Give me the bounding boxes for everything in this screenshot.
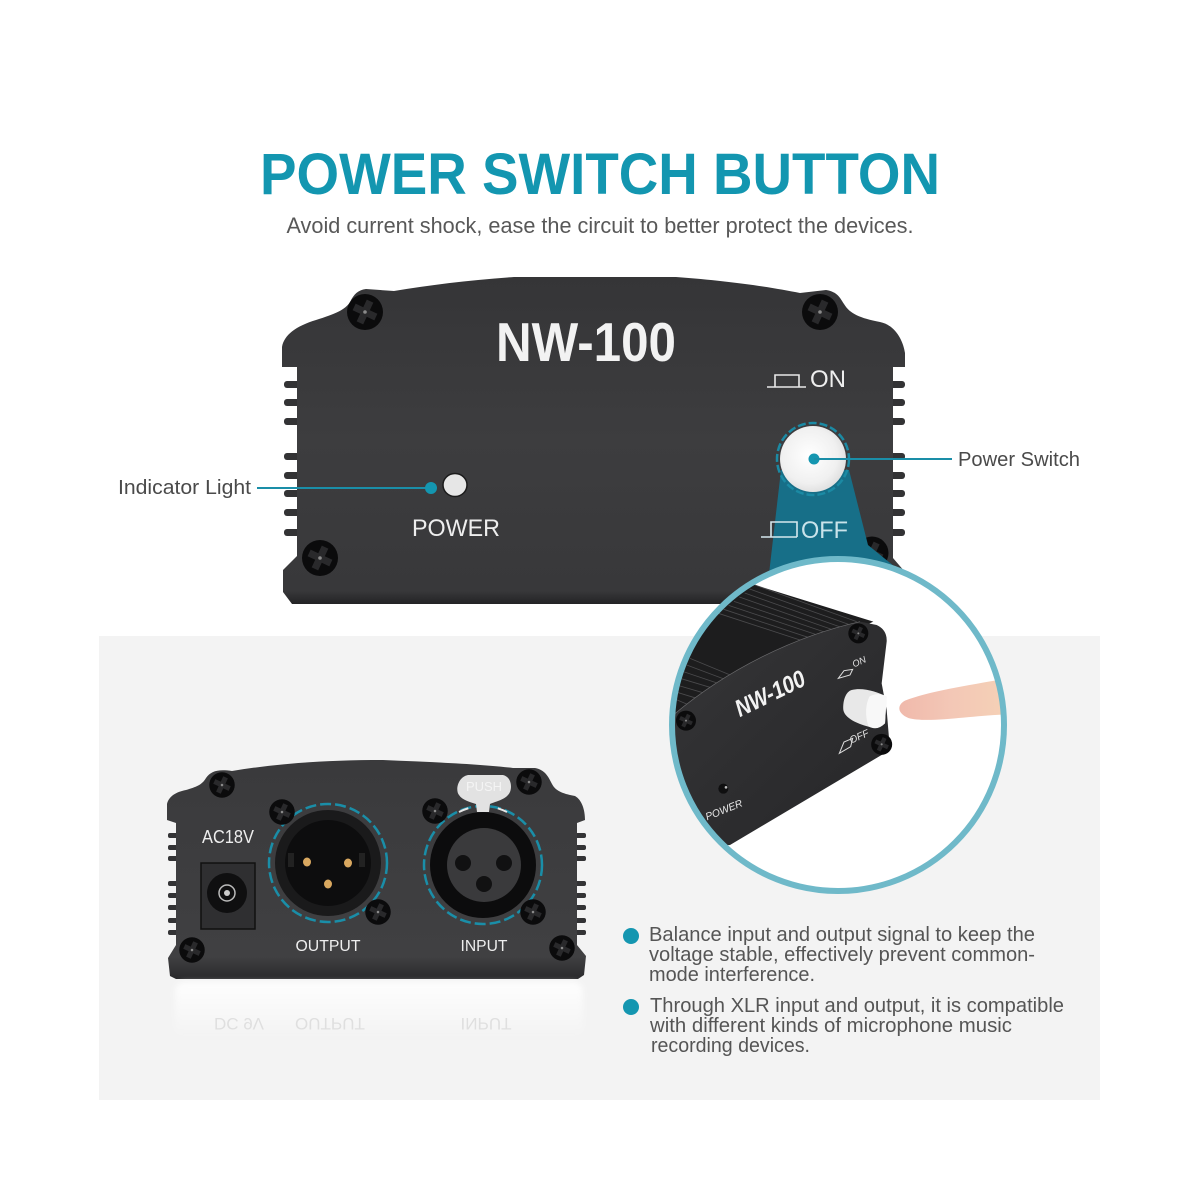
bullet: signal balance: voltage stable, effectively prevent common-	[649, 944, 1035, 966]
bullet: XLR compatibility	[623, 995, 1064, 1057]
zoom lens: finger pressing switch: NW-100	[731, 665, 810, 723]
zoom lens: finger pressing switch: OFF	[848, 728, 872, 746]
XLR input connector: PUSH	[466, 779, 502, 794]
XLR output connector	[269, 804, 387, 922]
callout: indicator light	[118, 477, 437, 499]
INPUT label: INPUT	[460, 938, 508, 955]
power jack	[201, 863, 255, 929]
cooling fins	[284, 381, 905, 536]
rear housing	[167, 760, 586, 979]
screws on top device	[302, 294, 888, 576]
bullet: XLR compatibility: Through XLR input and output, it is compatible	[650, 995, 1064, 1017]
callout: indicator light: Indicator Light	[118, 477, 251, 499]
title: POWER SWITCH BUTTON	[260, 142, 940, 207]
teal funnel connecting switch to zoom lens	[766, 470, 905, 600]
zoom lens: finger pressing switch: ON	[851, 654, 868, 669]
model label: NW-100	[496, 311, 676, 373]
device: top view of NW-100 front panel	[282, 277, 905, 604]
rear fins	[168, 833, 586, 935]
XLR input connector	[424, 775, 542, 924]
AC18V label: AC18V	[202, 827, 254, 847]
power switch knob with dashed ring	[777, 423, 849, 495]
reflection below rear panel: DC 9V	[214, 1014, 265, 1033]
rear panel screws	[179, 769, 575, 963]
indicator LED	[443, 474, 467, 496]
OFF marking: OFF	[801, 517, 848, 544]
zoom lens: finger pressing switch: POWER	[704, 798, 745, 823]
POWER label: POWER	[412, 515, 500, 542]
zoom lens: finger pressing switch	[660, 557, 1006, 893]
OFF marking	[761, 517, 848, 544]
push tab	[457, 775, 511, 812]
device: rear panel with connectors	[167, 760, 586, 979]
bullet: signal balance: Balance input and output signal to keep the	[649, 924, 1035, 946]
ON marking: ON	[810, 366, 846, 393]
bullet: XLR compatibility: with different kinds of microphone music	[649, 1015, 1012, 1037]
bullet: signal balance	[623, 924, 1035, 986]
reflection below rear panel	[175, 982, 583, 1038]
bullet: signal balance: mode interference.	[649, 964, 815, 986]
ON marking	[767, 366, 846, 393]
reflection below rear panel: INPUT	[460, 1014, 512, 1033]
callout: power switch: Power Switch	[958, 449, 1080, 471]
panel: lower grey background	[99, 636, 1100, 1100]
infographic canvas	[99, 153, 1100, 1100]
reflection below rear panel: OUTPUT	[295, 1014, 365, 1033]
housing body	[282, 277, 905, 604]
subtitle: Avoid current shock, ease the circuit to better protect the devices.	[286, 213, 914, 238]
OUTPUT label: OUTPUT	[296, 938, 361, 955]
bullet: XLR compatibility: recording devices.	[651, 1035, 810, 1057]
